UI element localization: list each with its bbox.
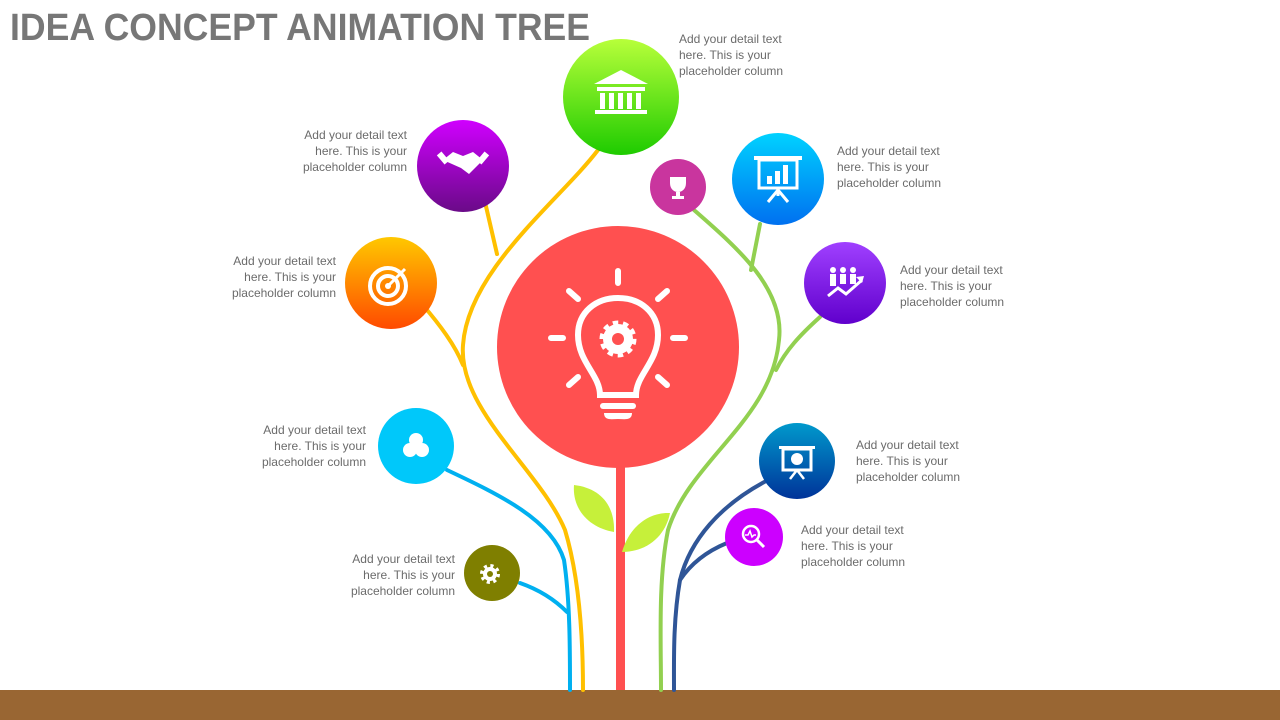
node: venn [378, 408, 454, 484]
text: chart: Add your detail text [837, 144, 940, 158]
text: gear: placeholder column [351, 584, 455, 598]
text: pie: Add your detail text [856, 438, 959, 452]
text: search: Add your detail text [801, 523, 904, 537]
central bulb circle [497, 226, 739, 468]
text: pie: here. This is your [856, 454, 948, 468]
text: gear: Add your detail text [352, 552, 456, 566]
text: search: placeholder column [801, 555, 905, 569]
text: pie: placeholder column [856, 470, 960, 484]
leaves [574, 485, 670, 552]
text: target: here. This is your [244, 270, 336, 284]
title: IDEA CONCEPT ANIMATION TREE [10, 7, 590, 49]
node: trophy [650, 159, 706, 215]
red stem [616, 440, 625, 690]
text: chart: here. This is your [837, 160, 929, 174]
node: gear [464, 545, 520, 601]
text: target: placeholder column [232, 286, 336, 300]
node: handshake [417, 120, 509, 212]
node: people growth [804, 242, 886, 324]
node: museum [563, 39, 679, 155]
text: people: placeholder column [900, 295, 1004, 309]
text: search: here. This is your [801, 539, 893, 553]
text: venn: here. This is your [274, 439, 366, 453]
node: chart board [732, 133, 824, 225]
branches [422, 150, 820, 690]
text: venn: Add your detail text [263, 423, 367, 437]
text: people: Add your detail text [900, 263, 1003, 277]
text: target: Add your detail text [233, 254, 337, 268]
node: target [345, 237, 437, 329]
text: gear: here. This is your [363, 568, 455, 582]
text: chart: placeholder column [837, 176, 941, 190]
node: pie board [759, 423, 835, 499]
text: museum: here. This is your [679, 48, 771, 62]
ground [0, 690, 1280, 720]
text: people: here. This is your [900, 279, 992, 293]
text: handshake: here. This is your [315, 144, 407, 158]
text: museum: placeholder column [679, 64, 783, 78]
text: museum: Add your detail text [679, 32, 782, 46]
node: search [725, 508, 783, 566]
text: handshake: Add your detail text [304, 128, 408, 142]
text: handshake: placeholder column [303, 160, 407, 174]
text: venn: placeholder column [262, 455, 366, 469]
